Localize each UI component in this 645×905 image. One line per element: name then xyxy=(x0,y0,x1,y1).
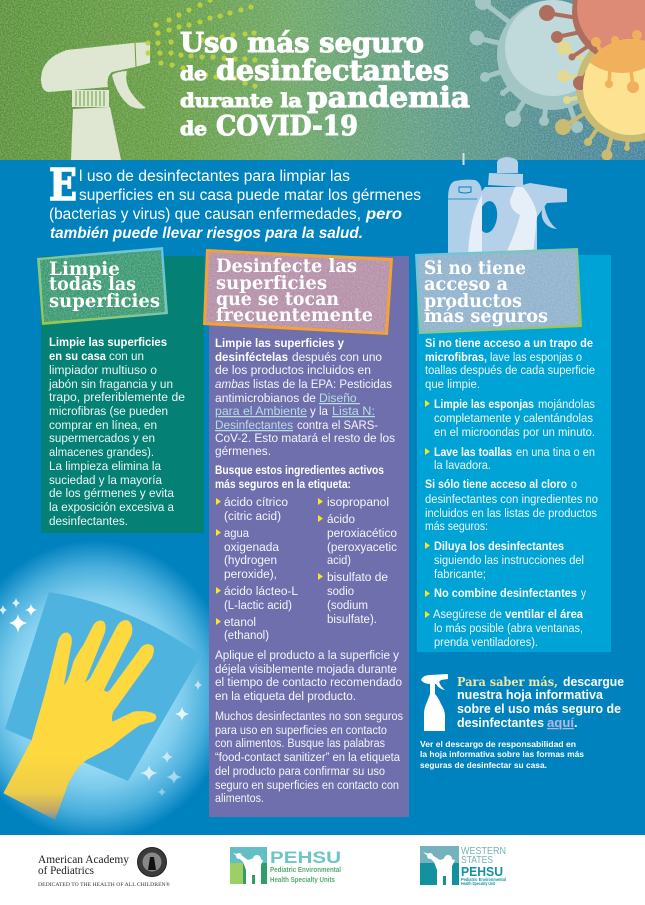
panel intro text: Limpie las superficies y xyxy=(215,336,344,350)
panel text: desinfectantes. xyxy=(49,514,128,528)
logo: American Academy of Pediatrics: of Pediatrics xyxy=(38,863,94,877)
panel intro text: lave las esponjas o xyxy=(490,350,582,364)
intro paragraph: pero xyxy=(365,206,402,223)
bleach text: Si sólo tiene acceso al cloro xyxy=(425,477,567,491)
logo: PEHSU: Pediatric Environmental xyxy=(270,865,341,874)
logo: Western States PEHSU: STATES xyxy=(461,855,493,866)
logo: Western States PEHSU: Health Specialty Unit xyxy=(461,881,495,886)
icon: white spray bottle xyxy=(421,674,448,731)
panel intro text: Si no tiene acceso a un trapo de xyxy=(425,336,593,350)
panel text: Limpie las superficies xyxy=(49,335,167,349)
ingredient list: column 2: bisulfato de xyxy=(327,570,388,584)
panel: limpie todas las superficies xyxy=(37,247,204,533)
ingredients heading: Busque estos ingredientes activos xyxy=(215,463,384,477)
ingredients heading: más seguros en la etiqueta: xyxy=(215,477,351,491)
bullets: dilute, do not combine, ventilate: prenda ventiladores). xyxy=(434,635,538,649)
logo: Western States PEHSU: WESTERN xyxy=(461,846,506,857)
disclaimer text: seguras de desinfectar su casa. xyxy=(420,760,547,770)
logo: Western States PEHSU: Pediatric Environmental xyxy=(461,877,506,882)
heading box: Desinfecte las xyxy=(216,256,357,277)
ingredient list: column 1 xyxy=(216,495,298,642)
panel text: comprar en línea, en xyxy=(49,418,157,432)
ingredient list: column 2: sodio xyxy=(327,584,354,598)
food contact text: seguro en superficies en contacto con xyxy=(215,778,399,792)
panel intro text: que limpie. xyxy=(425,377,480,391)
panel text: supermercados y en xyxy=(49,431,155,445)
bullets: dilute, do not combine, ventilate: Asegúrese de xyxy=(433,607,502,621)
ingredient list: column 1: ácido lácteo-L xyxy=(224,584,298,598)
panel intro text: y la xyxy=(310,404,328,418)
panel intro text: de los productos incluidos en xyxy=(215,363,371,377)
ingredient list: column 1: oxigenada xyxy=(224,540,279,554)
panel text: La limpieza elimina la xyxy=(49,459,161,473)
panel intro text: Desinfectantes xyxy=(215,418,293,432)
ingredients heading xyxy=(215,463,384,491)
bullets: dilute, do not combine, ventilate: No combine desinfectantes xyxy=(434,586,577,600)
ingredient list: column 1: peroxide), xyxy=(224,567,277,581)
heading box: todas las xyxy=(49,274,136,295)
bullets: dilute, do not combine, ventilate: y xyxy=(581,586,587,600)
intro paragraph: l uso de desinfectantes para limpiar las xyxy=(79,168,350,185)
disclaimer text: Ver el descargo de responsabilidad en xyxy=(420,739,576,749)
panel intro text: ambas xyxy=(215,377,250,391)
callout: para saber mas: aquí xyxy=(547,716,575,730)
callout: para saber mas: Para saber más, xyxy=(457,674,558,689)
icon: yellow virus ring xyxy=(555,32,645,160)
title: durante la xyxy=(180,90,302,112)
panel intro text: antimicrobianos de xyxy=(215,391,316,405)
contact time text: en la etiqueta del producto. xyxy=(215,689,356,703)
bullets: sponges and towels: en el microondas por un minuto. xyxy=(434,425,595,439)
panel text: almacenes grandes). xyxy=(49,445,154,459)
callout: para saber mas: desinfectantes xyxy=(457,716,544,730)
bullets: dilute, do not combine, ventilate: siguiendo las instrucciones del xyxy=(434,553,584,567)
panel intro text: gérmenes. xyxy=(215,444,271,458)
illustration: gloved hand wiping with cloth xyxy=(0,592,202,820)
icon: spray bottle xyxy=(41,42,150,160)
panel: desinfecte las superficies xyxy=(203,249,409,817)
bleach text: incluidos en las listas de productos xyxy=(425,506,597,520)
bullets: dilute, do not combine, ventilate: ventilar el área xyxy=(505,607,583,621)
title: desinfectantes xyxy=(216,54,449,87)
bleach text: desinfectantes con ingredientes no xyxy=(425,492,598,506)
spray mist dots xyxy=(145,0,258,89)
heading box: que se tocan xyxy=(216,289,340,310)
bullets: dilute, do not combine, ventilate: lo más posible (abra ventanas, xyxy=(434,621,583,635)
ingredient list: column 2: acid) xyxy=(327,553,351,567)
panel text: limpiador multiuso o xyxy=(49,363,157,377)
ingredient list: column 2: (peroxyacetic xyxy=(327,540,397,554)
ingredient list: column 1: (citric acid) xyxy=(224,509,281,523)
logo: PEHSU: Health Specialty Units xyxy=(270,875,335,884)
ingredient list: column 2: bisulfate). xyxy=(327,612,377,626)
panel intro text: CoV-2. Esto matará el resto de los xyxy=(215,431,395,445)
panel text: microfibras (se pueden xyxy=(49,404,168,418)
contact time text xyxy=(215,648,402,703)
heading box: frecuentemente xyxy=(216,305,373,326)
heading box: más seguros xyxy=(424,306,548,327)
heading box: acceso a xyxy=(424,274,508,295)
panel intro text: desinféctelas xyxy=(215,350,288,364)
heading box: superficies xyxy=(216,273,327,294)
disclaimer text xyxy=(420,739,584,770)
title: de xyxy=(180,63,207,85)
disclaimer text: la hoja informativa sobre las formas más xyxy=(420,749,584,759)
cloth xyxy=(5,592,201,781)
ingredient list: column 2 xyxy=(318,495,397,626)
ingredient list: column 1: (hydrogen xyxy=(224,553,277,567)
ingredient list: column 2: peroxiacético xyxy=(327,526,397,540)
logo: PEHSU xyxy=(230,847,341,884)
food contact text: “food-contact sanitizer” en la etiqueta xyxy=(215,750,400,764)
intro paragraph: también puede llevar riesgos para la salud. xyxy=(50,225,363,242)
panel text: jabón sin fragancia y un xyxy=(48,377,173,391)
icon: cleaning product bottles xyxy=(448,153,567,255)
title: COVID-19 xyxy=(216,111,358,142)
ingredient list: column 1: ácido cítrico xyxy=(224,495,288,509)
bleach text xyxy=(425,477,598,533)
contact time text: el tiempo de contacto recomendado xyxy=(215,675,402,689)
food contact text: alimentos. xyxy=(215,791,264,805)
heading box xyxy=(203,249,393,335)
panel intro text: toallas después de cada superficie xyxy=(425,363,595,377)
panel intro text xyxy=(425,336,595,391)
title xyxy=(180,28,470,142)
ingredient list: column 1: etanol xyxy=(224,615,256,629)
ingredient list: column 1: (L-lactic acid) xyxy=(224,598,292,612)
callout: para saber mas: nuestra hoja informativa xyxy=(457,688,604,702)
panel: si no tiene acceso xyxy=(415,248,611,652)
bleach text: o xyxy=(571,477,577,491)
bullets: sponges and towels: completamente y calentándolas xyxy=(434,411,593,425)
panel intro text: después con uno xyxy=(292,350,382,364)
sparkles xyxy=(0,598,202,796)
panel intro text: para el Ambiente xyxy=(215,404,307,418)
callout: para saber mas: sobre el uso más seguro de xyxy=(457,702,621,716)
heading box xyxy=(37,247,168,325)
header banner xyxy=(0,0,645,160)
glove xyxy=(3,620,156,820)
food contact text: con alimentos. Busque las palabras xyxy=(215,736,385,750)
intro paragraph xyxy=(49,160,421,242)
callout: para saber mas: . xyxy=(574,716,577,730)
panel background xyxy=(209,256,409,817)
panel intro text: Lista N: xyxy=(332,404,375,418)
heading box: Si no tiene xyxy=(424,258,526,279)
bullets: dilute, do not combine, ventilate: Diluya los desinfectantes xyxy=(434,539,564,553)
bullets: dilute, do not combine, ventilate: fabricante; xyxy=(434,567,486,581)
callout: para saber mas: descargue xyxy=(563,675,624,689)
panel intro text: contra el SARS- xyxy=(297,418,378,432)
food contact text xyxy=(215,709,403,805)
panel text: con un xyxy=(109,349,144,363)
ingredient list: column 1: (ethanol) xyxy=(224,628,269,642)
ingredient list: column 1: agua xyxy=(224,526,249,540)
heading box: Limpie xyxy=(49,259,120,280)
ingredient list: column 2: (sodium xyxy=(327,598,368,612)
panel text: en su casa xyxy=(49,349,106,363)
panel intro text: microfibras, xyxy=(425,350,487,364)
footer xyxy=(0,835,645,905)
bleach text: más seguros: xyxy=(425,519,488,533)
logo: Western States PEHSU: PEHSU xyxy=(461,864,503,879)
icon: yellow virus core xyxy=(583,30,645,135)
panel intro text: listas de la EPA: Pesticidas xyxy=(253,377,392,391)
heading box: productos xyxy=(424,291,522,312)
intro paragraph: (bacterias y virus) que causan enfermedades, xyxy=(49,206,361,223)
drop cap: E xyxy=(49,160,77,211)
ingredient list: column 2: isopropanol xyxy=(327,495,389,509)
panel text: de los gérmenes y evita xyxy=(49,486,174,500)
intro paragraph: superficies en su casa puede matar los gérmenes xyxy=(79,187,421,204)
contact time text: Aplique el producto a la superficie y xyxy=(215,648,400,662)
food contact text: Muchos desinfectantes no son seguros xyxy=(215,709,403,723)
food contact text: para uso en superficies en contacto xyxy=(215,723,387,737)
panel intro text xyxy=(215,336,395,458)
panel background xyxy=(417,255,611,652)
title: Uso más seguro xyxy=(180,28,424,59)
bullets: dilute, do not combine, ventilate xyxy=(425,539,587,649)
bullets: sponges and towels: Lave las toallas xyxy=(434,445,512,459)
title: de xyxy=(180,118,207,140)
icon: salmon virus xyxy=(539,0,645,90)
logo: American Academy of Pediatrics: DEDICATED TO THE HEALTH OF ALL CHILDREN® xyxy=(38,881,170,888)
bullets: sponges and towels xyxy=(425,397,595,472)
glowing background behind hand xyxy=(0,540,233,840)
logo: American Academy of Pediatrics xyxy=(38,848,170,888)
bullets: sponges and towels: la lavadora. xyxy=(434,458,491,472)
bullets: sponges and towels: mojándolas xyxy=(538,397,595,411)
panel text: la exposición excesiva a xyxy=(49,500,174,514)
icon: grey virus xyxy=(470,0,590,133)
heading box: superficies xyxy=(49,291,160,312)
title: pandemia xyxy=(307,81,470,114)
contact time text: déjela visiblemente mojada durante xyxy=(215,662,397,676)
logo: PEHSU: PEHSU xyxy=(270,848,341,867)
food contact text: del producto para confirmar su uso xyxy=(215,764,385,778)
panel text: trapo, preferiblemente de xyxy=(49,390,185,404)
panel background xyxy=(41,256,204,533)
panel text: suciedad y la mayoría xyxy=(49,473,162,487)
panel intro text: Diseño xyxy=(319,391,360,405)
logo: Western States PEHSU xyxy=(420,846,506,886)
heading box xyxy=(415,248,582,334)
bullets: sponges and towels: en una tina o en xyxy=(516,445,595,459)
panel text xyxy=(48,335,185,528)
logo: American Academy of Pediatrics: American Academy xyxy=(38,852,129,866)
ingredient list: column 2: ácido xyxy=(327,512,355,526)
header background xyxy=(0,0,645,160)
bullets: sponges and towels: Limpie las esponjas xyxy=(434,397,534,411)
callout: para saber mas xyxy=(457,674,624,730)
